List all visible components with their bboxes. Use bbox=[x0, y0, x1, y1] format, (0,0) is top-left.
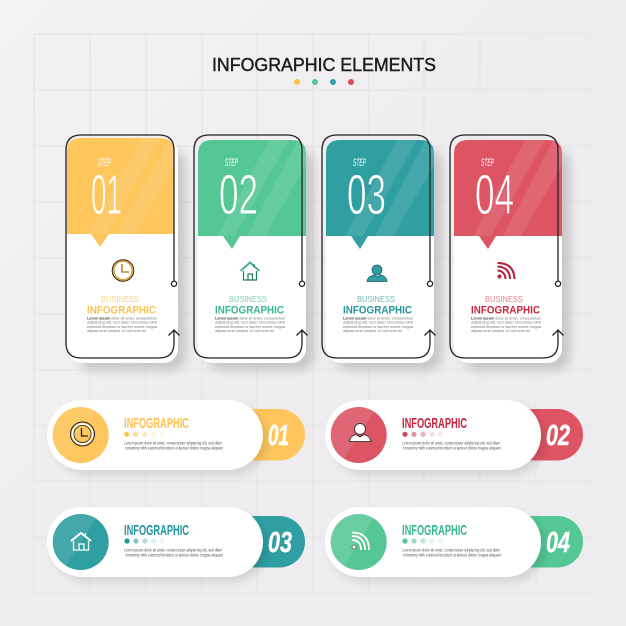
panel: step 02 card: STEP bbox=[225, 157, 238, 169]
banner body text bbox=[124, 440, 224, 451]
card body text: euismod tincidunt ut laoreet dolore magna bbox=[343, 324, 414, 329]
card body text: aliquam erat volutpat. Ut wisi enim ad. bbox=[471, 328, 531, 333]
panel: banner 04 bbox=[325, 507, 583, 582]
card heading: BUSINESS bbox=[357, 295, 395, 304]
icon disc bbox=[52, 407, 109, 463]
panel: step 04 card: STEP bbox=[481, 157, 494, 169]
panel: step 02 card bbox=[194, 135, 314, 370]
step 02 coloured header bbox=[198, 140, 306, 249]
banner heading: INFOGRAPHIC bbox=[402, 415, 467, 432]
number tab 03 bbox=[230, 516, 305, 568]
card body text: aliquam erat volutpat. Ut wisi enim ad. bbox=[87, 328, 147, 333]
step 04 coloured header bbox=[454, 140, 562, 249]
panel: step 04 card: INFOGRAPHIC bbox=[471, 304, 540, 316]
card body text bbox=[87, 316, 158, 333]
banner body text: Lorem ipsum dolor sit amet, consectetuer adipiscing elit, sed diam bbox=[124, 548, 222, 552]
icon: clock bbox=[70, 422, 94, 446]
card body text bbox=[343, 316, 414, 333]
title: INFOGRAPHIC ELEMENTS bbox=[212, 55, 436, 75]
panel: step 03 card: STEP bbox=[353, 157, 366, 169]
panel: step 04 card bbox=[450, 135, 570, 370]
card heading: BUSINESS bbox=[485, 295, 523, 304]
card body text: aliquam erat volutpat. Ut wisi enim ad. bbox=[215, 328, 275, 333]
icon: clock bbox=[113, 260, 133, 280]
panel: step 02 card: INFOGRAPHIC bbox=[215, 304, 284, 316]
banner body text: Lorem ipsum dolor sit amet, consectetuer adipiscing elit, sed diam bbox=[124, 440, 222, 446]
outline with arrow bbox=[450, 135, 564, 358]
card body text: Lorem ipsum dolor sit amet, consectetuer bbox=[343, 316, 414, 320]
icon disc bbox=[52, 514, 109, 570]
icon: rss bbox=[352, 532, 369, 550]
card body text: adipiscing elit, sed diam nonummy nibh bbox=[343, 320, 413, 325]
card body text bbox=[471, 316, 542, 333]
outline with arrow bbox=[66, 135, 180, 358]
banner body text: Lorem ipsum dolor sit amet, consectetuer adipiscing elit, sed diam bbox=[402, 548, 500, 552]
progress dots bbox=[124, 538, 165, 544]
banner body text bbox=[402, 440, 502, 451]
icon: rss bbox=[498, 263, 514, 279]
progress dots bbox=[124, 432, 165, 437]
card body text: adipiscing elit, sed diam nonummy nibh bbox=[471, 320, 541, 325]
progress dots bbox=[402, 432, 443, 437]
card body text: adipiscing elit, sed diam nonummy nibh bbox=[215, 320, 285, 325]
banner body text: nonummy nibh euismod tincidunt ut laoreet dolore magna aliquam. bbox=[403, 553, 502, 558]
card heading: BUSINESS bbox=[229, 295, 267, 304]
panel: step 01 card: 01 bbox=[91, 163, 122, 227]
outline with arrow bbox=[194, 135, 308, 358]
icon disc bbox=[330, 514, 387, 570]
icon: user bbox=[367, 265, 387, 282]
card body text bbox=[215, 316, 286, 333]
panel: step 01 card bbox=[66, 135, 186, 370]
number tab 04 bbox=[508, 516, 583, 568]
card body text: Lorem ipsum dolor sit amet, consectetuer bbox=[87, 316, 158, 320]
step number: 03 bbox=[347, 163, 386, 227]
card body text: euismod tincidunt ut laoreet dolore magna bbox=[87, 324, 158, 329]
banner heading: INFOGRAPHIC bbox=[124, 415, 189, 432]
tab number: 04 bbox=[546, 527, 570, 559]
tab number: 01 bbox=[268, 420, 289, 452]
banner body text bbox=[402, 548, 502, 558]
card body text: aliquam erat volutpat. Ut wisi enim ad. bbox=[343, 328, 403, 333]
icon: house bbox=[240, 262, 260, 280]
banner heading: INFOGRAPHIC bbox=[124, 522, 189, 539]
step 01 coloured header bbox=[67, 138, 174, 247]
step number: 04 bbox=[475, 163, 514, 227]
step 03 coloured header bbox=[326, 140, 434, 249]
panel: banner 02 bbox=[325, 400, 583, 475]
banner body text bbox=[124, 548, 224, 558]
card body text: Lorem ipsum dolor sit amet, consectetuer bbox=[215, 316, 286, 320]
panel: step 03 card bbox=[322, 135, 442, 370]
card body text: Lorem ipsum dolor sit amet, consectetuer bbox=[471, 316, 542, 320]
panel: step 01 card: INFOGRAPHIC bbox=[87, 304, 156, 316]
progress dots bbox=[402, 538, 443, 544]
number tab 02 bbox=[508, 409, 583, 460]
step number: 02 bbox=[219, 163, 258, 227]
card body text: euismod tincidunt ut laoreet dolore magna bbox=[471, 324, 542, 329]
tab number: 03 bbox=[268, 527, 292, 559]
outline with arrow bbox=[322, 135, 436, 358]
card body text: adipiscing elit, sed diam nonummy nibh bbox=[87, 320, 157, 325]
tab number: 02 bbox=[546, 420, 570, 452]
banner body text: nonummy nibh euismod tincidunt ut laoreet dolore magna aliquam. bbox=[125, 553, 224, 558]
number tab 01 bbox=[230, 409, 305, 460]
panel: banner 03 bbox=[47, 507, 305, 582]
title colour dots bbox=[294, 79, 354, 85]
panel: step 03 card: INFOGRAPHIC bbox=[343, 304, 412, 316]
banner body text: nonummy nibh euismod tincidunt ut laoreet dolore magna aliquam. bbox=[403, 446, 502, 451]
icon: user bbox=[350, 424, 371, 442]
banner heading: INFOGRAPHIC bbox=[402, 522, 467, 539]
icon: house bbox=[71, 533, 91, 550]
card body text: euismod tincidunt ut laoreet dolore magna bbox=[215, 324, 286, 329]
icon disc bbox=[330, 407, 387, 463]
panel: step 01 card: STEP bbox=[98, 157, 111, 169]
panel: banner 01 bbox=[47, 400, 305, 475]
card heading: BUSINESS bbox=[101, 295, 139, 304]
banner body text: Lorem ipsum dolor sit amet, consectetuer adipiscing elit, sed diam bbox=[402, 440, 500, 446]
banner body text: nonummy nibh euismod tincidunt ut laoreet dolore magna aliquam. bbox=[125, 446, 224, 451]
